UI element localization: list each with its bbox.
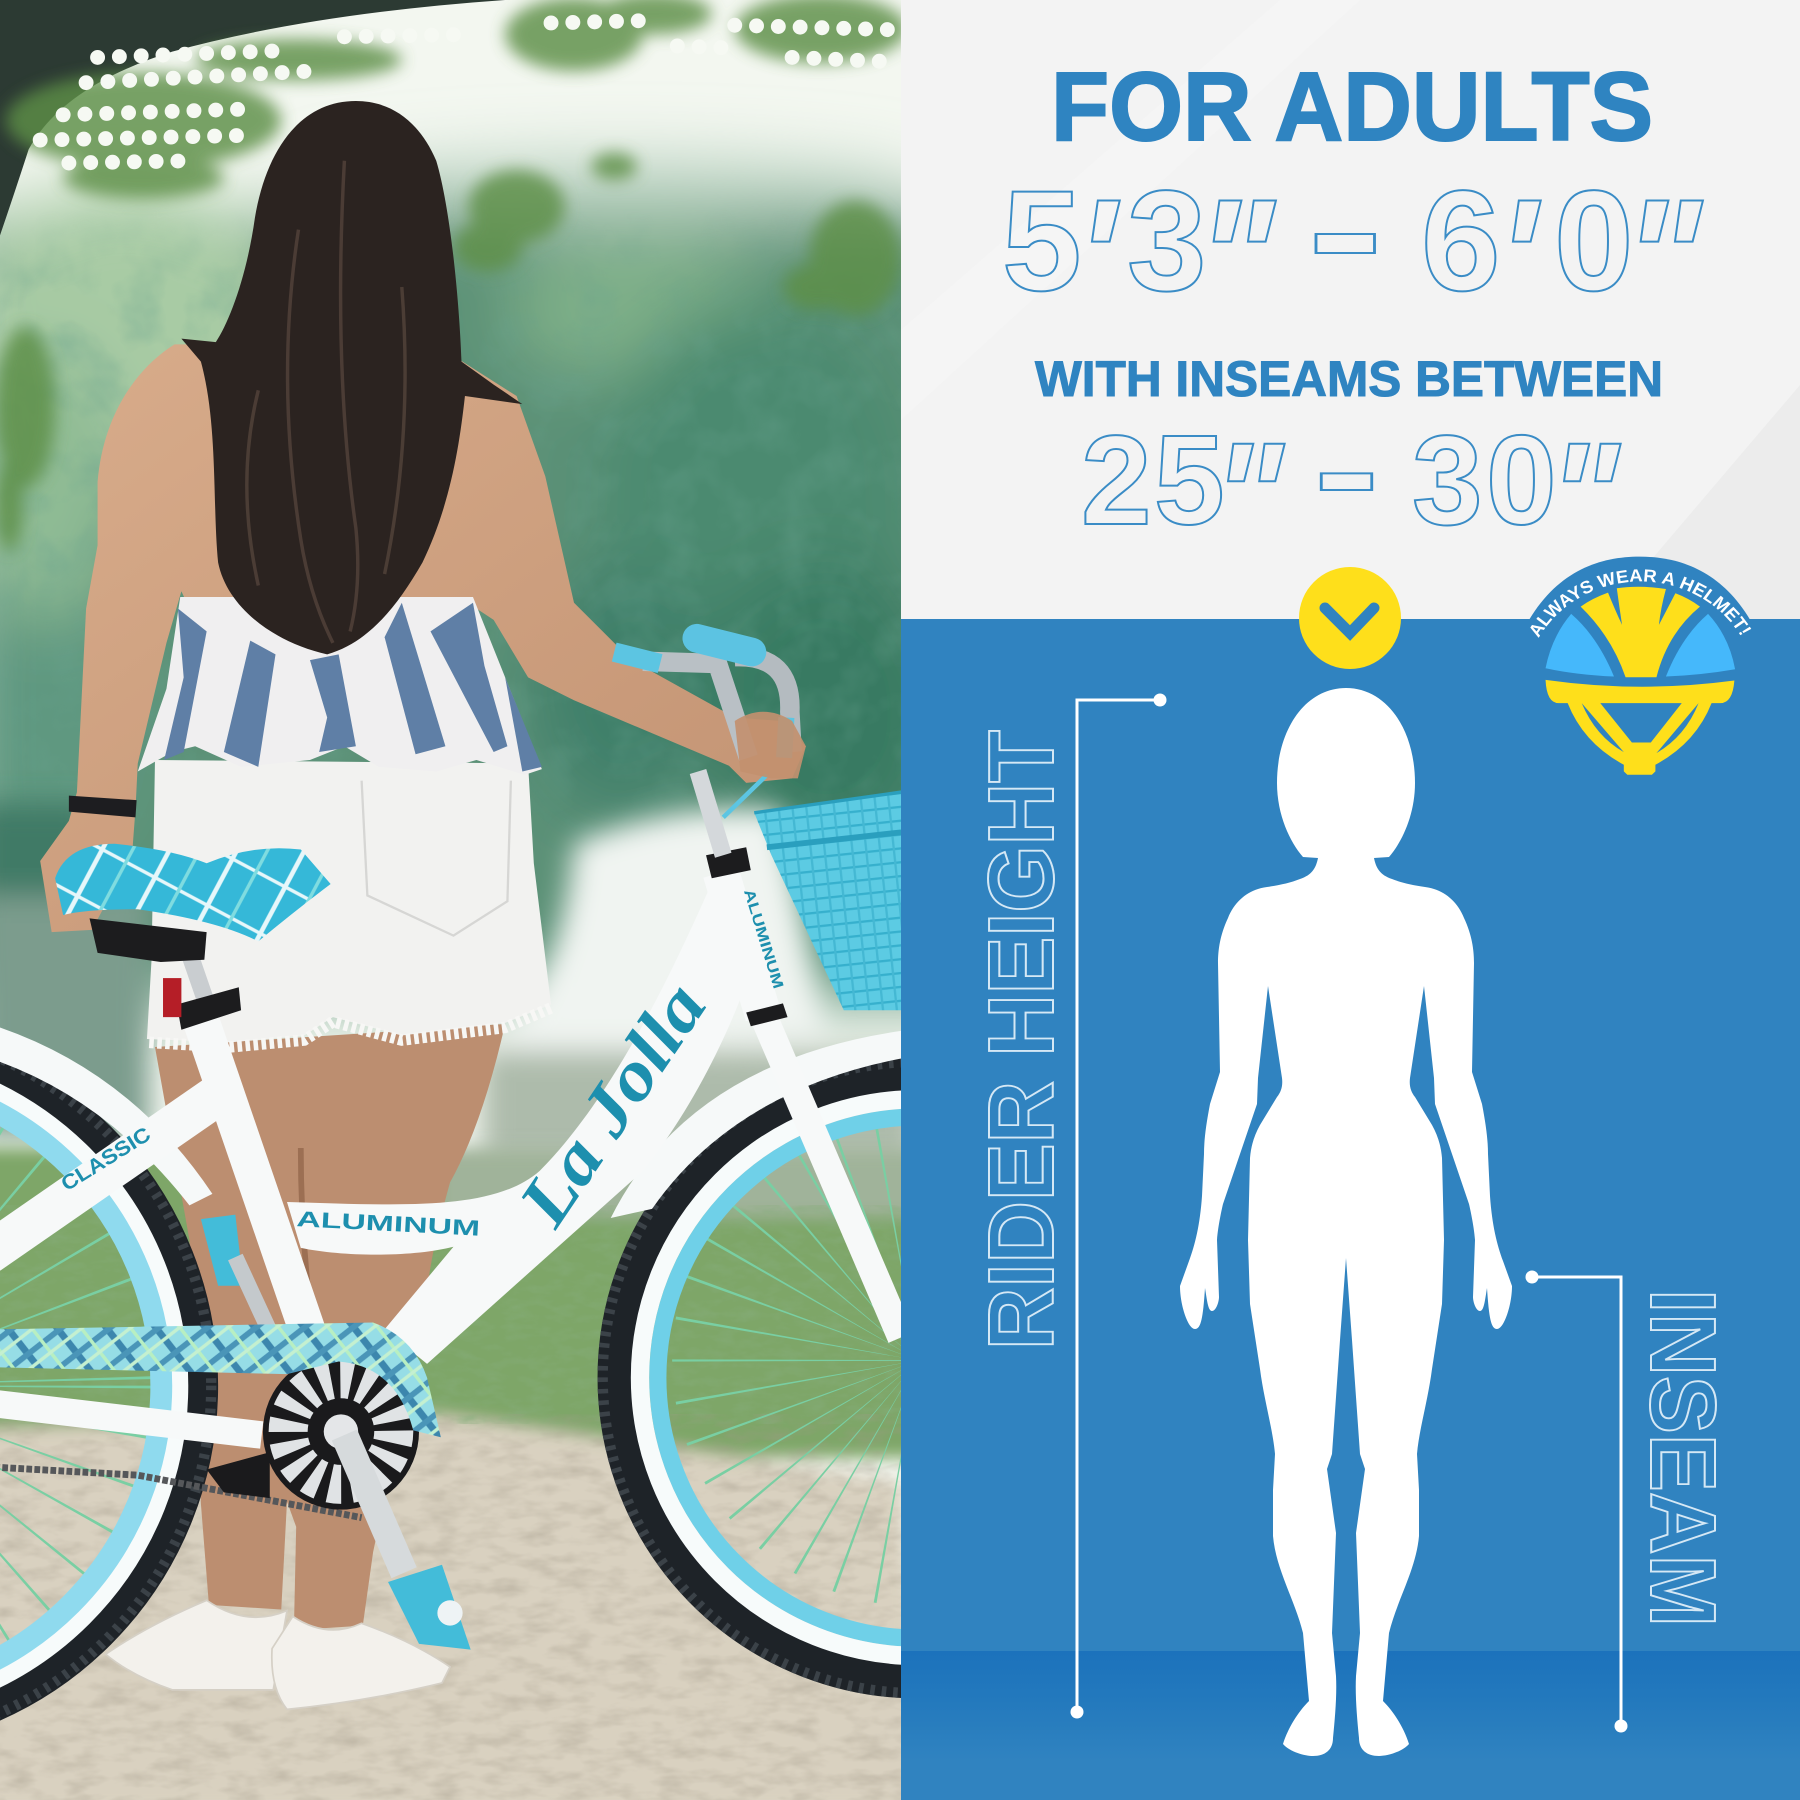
outlined inseam range: 2 [1081,409,1152,551]
outlined height range [1002,141,1703,349]
bike: plaid saddle and seat post [55,844,331,1030]
outlined height range: 0 [1554,162,1634,321]
front wheel [598,1058,901,1698]
bike: far pedal and crank [201,1215,270,1332]
bike fenders [0,1027,901,1218]
rear wheel [0,1026,211,1745]
photo background: sky, forest, lake, grass, sand [0,0,987,1800]
panel: lifestyle photo of woman with cruiser bike [0,0,901,1800]
bike frame lettering [57,887,787,1241]
woman: hand on handlebar [735,712,806,778]
outlined height range: ' [1076,165,1120,349]
bike: handlebar with blue grips [614,638,792,855]
outlined height range: ' [1497,165,1541,349]
outlined height range: 5 [1002,162,1082,321]
bike frame: white tubes [0,1014,901,1449]
icon: helmet badge [1530,556,1752,775]
heading: for adults: FOR ADULTS [1051,52,1653,161]
outlined inseam range: 0 [1486,409,1557,551]
woman: white sneakers [106,1600,450,1709]
rider height label: RIDER HEIGHT [969,730,1073,1350]
outlined inseam range [1081,392,1621,579]
bike frame lettering: ALUMINUM [740,887,787,991]
bike frame lettering: ALUMINUM [296,1206,481,1241]
outlined inseam range: 3 [1412,409,1483,551]
subheading: with inseams between: WITH INSEAMS BETWEEN [1035,351,1663,407]
icon: helmet badge: ALWAYS WEAR A HELMET! [1530,569,1752,638]
outlined height range: - [1307,141,1384,320]
darker floor band [901,1651,1800,1761]
rider height measuring line [1070,694,1166,1718]
panel: blue measurement background [901,619,1800,1800]
outlined inseam range: - [1314,392,1380,548]
outlined height range: 6 [1421,162,1501,321]
outlined inseam range: 5 [1154,409,1225,551]
bike frame lettering: CLASSIC [57,1123,155,1196]
woman: bare back and arms [40,344,806,932]
bike: teal woven basket [754,792,901,1010]
bike frame lettering: La Jolla [504,969,722,1241]
outlined height range: 3 [1127,162,1207,321]
outlined inseam range: " [1212,411,1285,579]
woman: striped peplum top [138,597,542,775]
inseam label: INSEAM [1631,1289,1735,1627]
bike: chain [0,1467,362,1518]
bike: black collars on head tube [706,847,788,1026]
figure: white woman silhouette [1180,688,1512,1756]
tree trunk and foliage with sky bokeh [0,0,907,551]
bike: chainring [207,1353,419,1510]
woman: long dark hair [181,101,522,654]
woman: white denim shorts [147,760,551,1047]
spokes of the rear and front wheels [0,1231,1047,1541]
icon: yellow circle with chevron [1299,567,1401,669]
outlined height range: " [1623,165,1703,349]
bike: crank arm and pedal [344,1435,471,1650]
outlined inseam range: " [1548,411,1621,579]
inseam measuring line [1526,1270,1628,1732]
outlined height range: " [1196,165,1276,349]
bike: plaid chain guard [0,1322,441,1437]
woman: black wrist watch [69,796,137,817]
panel: light grey header background [901,0,1800,620]
woman: legs [155,1024,505,1630]
